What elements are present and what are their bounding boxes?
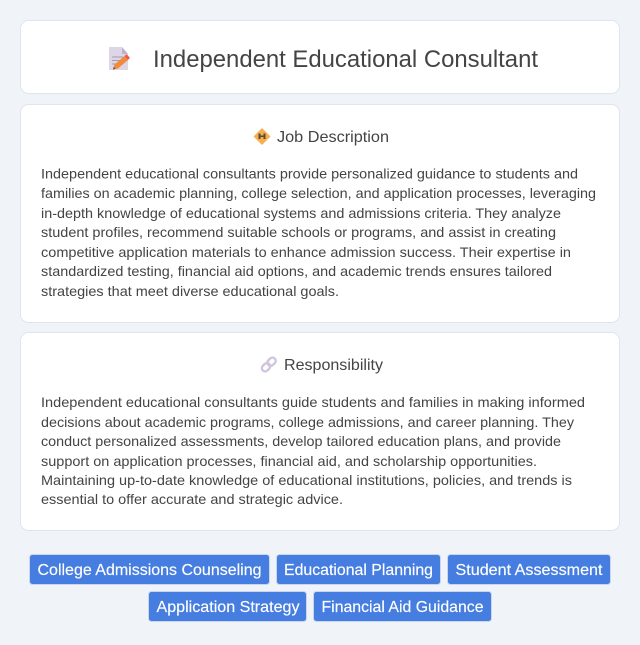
icon: link (261, 356, 277, 373)
tag: financial aid guidance: Financial Aid Guidance (322, 599, 484, 616)
text block: job description: strategies that meet diverse educational goals. (41, 283, 339, 299)
text block: responsibility: Maintaining up-to-date knowledge of educational institutions, policies, and trends is (41, 472, 572, 488)
panel: responsibility (20, 332, 620, 530)
tag: financial aid guidance (314, 592, 492, 622)
skill tags (30, 554, 610, 622)
panel: title card (20, 20, 620, 94)
text block: job description: student profiles, recommend suitable schools or programs, and assist in creating (41, 224, 556, 240)
tag: application strategy: Application Strategy (156, 599, 300, 616)
tag: student assessment (448, 554, 610, 584)
text block: job description: standardized testing, financial aid options, and academic trends ensures tailored (41, 263, 552, 279)
text block: responsibility (41, 394, 585, 507)
text block: responsibility: Independent educational consultants guide students and families in making informed (41, 394, 585, 410)
text block: responsibility: essential to offer accurate and strategic advice. (41, 491, 343, 507)
text block: job description: competitive application materials to enhance admission success. Their expertise in (41, 244, 571, 260)
text block: responsibility: conduct personalized assessments, develop tailored education plans, and provide (41, 433, 561, 449)
tag: student assessment: Student Assessment (456, 562, 603, 579)
title: Independent Educational Consultant (153, 46, 538, 73)
text block: job description (41, 166, 596, 299)
text block: job description: families on academic planning, college selection, and application processes, leveraging (41, 185, 596, 201)
tag: college admissions counseling (30, 554, 270, 584)
text block: job description: Independent educational consultants provide personalized guidance to students and (41, 166, 578, 182)
tag: educational planning (276, 554, 440, 584)
panel: job description (20, 104, 620, 322)
heading: job description: Job Description (277, 129, 389, 146)
tag: college admissions counseling: College Admissions Counseling (38, 562, 262, 579)
text block: responsibility: support on application processes, financial aid, and scholarship opportunities. (41, 453, 537, 469)
icon: orange diamond (254, 128, 270, 145)
icon: memo with pencil (109, 47, 130, 70)
text block: responsibility: decisions about academic programs, college admissions, and career planning. They (41, 414, 574, 430)
tag: application strategy (148, 592, 306, 622)
tag: educational planning: Educational Planning (284, 562, 433, 579)
heading: responsibility: Responsibility (284, 357, 383, 374)
text block: job description: in-depth knowledge of educational systems and admissions criteria. They analyze (41, 205, 561, 221)
